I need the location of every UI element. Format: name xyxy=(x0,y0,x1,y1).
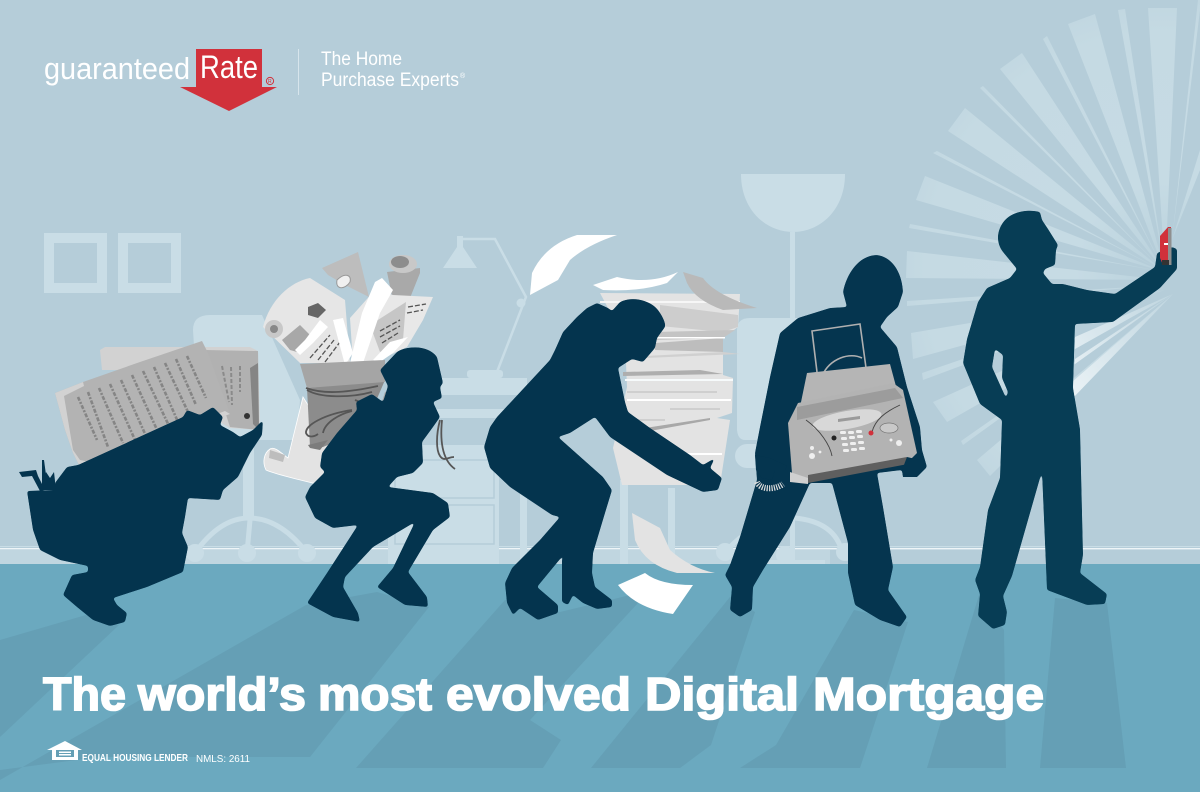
hand left xyxy=(755,455,787,480)
long scroll xyxy=(264,397,330,486)
floor xyxy=(0,564,1200,792)
paper stack xyxy=(600,293,740,485)
icon: tools in belt xyxy=(19,460,56,491)
desk lamp xyxy=(443,236,526,378)
logo xyxy=(44,49,466,111)
stone tablet front xyxy=(55,341,230,467)
bright rays lower right xyxy=(1072,294,1173,398)
light rays from phone xyxy=(906,0,1200,476)
equal housing lender text: EQUAL HOUSING LENDER xyxy=(82,752,188,764)
flying paper: white top left xyxy=(530,235,617,295)
icon: smartphone xyxy=(1160,227,1172,265)
wall background xyxy=(0,0,1200,565)
phone coil xyxy=(757,482,783,488)
silhouette: man xyxy=(963,211,1177,629)
flying paper: white lower xyxy=(618,573,693,614)
figure 5: man with phone xyxy=(963,211,1177,629)
logo: Rate xyxy=(200,49,258,85)
skirting board xyxy=(0,546,1200,564)
picture frame left xyxy=(44,233,107,293)
flying paper: white top xyxy=(593,272,678,290)
hand right xyxy=(902,457,926,477)
fax machine xyxy=(757,324,917,488)
desk xyxy=(388,378,675,564)
office chair right xyxy=(716,318,854,564)
white loose papers xyxy=(295,278,408,365)
scroll bundle xyxy=(263,252,433,365)
title: most xyxy=(318,668,432,720)
rope xyxy=(306,386,378,436)
figure 4: man carrying fax machine xyxy=(725,255,927,627)
logo: guaranteed xyxy=(44,52,190,86)
logo arrow xyxy=(180,49,277,111)
silhouette: woman reaching xyxy=(484,299,722,620)
picture frame right xyxy=(118,233,181,293)
office chair left xyxy=(186,315,316,562)
figure 2: crouching woman with sack of scrolls xyxy=(263,252,455,622)
title: The xyxy=(43,668,126,720)
logo: The Home xyxy=(321,49,402,70)
stone tablet right xyxy=(205,350,259,430)
flying paper: light lower xyxy=(632,513,715,573)
title: Digital xyxy=(645,668,799,720)
logo: R xyxy=(268,79,272,85)
equal housing lender icon xyxy=(47,741,82,760)
sack xyxy=(300,360,395,450)
hand rope xyxy=(437,420,455,469)
logo: ® xyxy=(460,72,466,80)
stone tablet back xyxy=(100,347,260,430)
logo: Purchase Experts xyxy=(321,70,459,91)
NMLS number: NMLS: 2611 xyxy=(196,753,250,765)
title: evolved xyxy=(446,668,631,720)
flying paper: grey top xyxy=(683,272,757,310)
silhouette: man xyxy=(725,255,927,627)
silhouette: worker xyxy=(27,407,263,626)
figure 1: stooped worker with stone tablets xyxy=(19,341,263,626)
floor lamp xyxy=(730,174,845,564)
title: Mortgage xyxy=(813,668,1044,720)
silhouette: woman xyxy=(305,347,450,622)
title: world’s xyxy=(137,668,306,720)
